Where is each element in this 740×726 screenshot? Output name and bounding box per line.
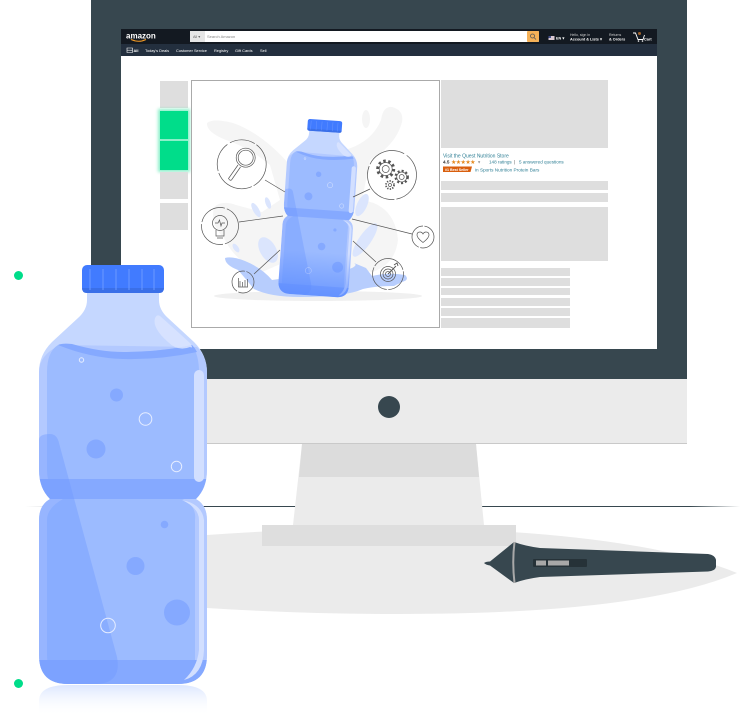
store link: Visit the Quest Nutrition Store [443,154,509,160]
nav links: Gift Cards [235,48,253,53]
blue droplets [231,192,381,266]
icon: heart [412,226,434,248]
blue puddle [225,257,407,297]
header links: Cart [644,38,652,42]
highlighted thumbnails [158,109,190,172]
header links [548,32,652,42]
product info column [441,80,608,328]
header links: Account & Lists ▾ [570,38,603,42]
header links: Hello, sign in [570,33,590,37]
best seller badge [443,166,540,172]
product thumbnails [158,81,190,230]
product image panel [192,80,440,328]
grey splash background [207,107,402,272]
text placeholders [441,181,608,328]
nav links: All [134,48,138,53]
monitor stand [262,444,516,546]
stylus pen [484,542,716,583]
search bar [190,31,539,42]
small bottle [278,118,360,298]
nav links: Today's Deals [145,48,169,53]
nav links: Registry [214,48,228,53]
amazon logo: amazon [126,32,156,40]
nav links [127,48,267,53]
horizon line [25,506,740,507]
search bar: Search Amazon [207,34,235,39]
decorative dots [14,271,23,688]
floor shadow [214,291,422,301]
header links: EN ▾ [556,36,565,40]
nav links: Customer Service [176,48,207,53]
ratings row: 148 ratings [489,160,512,164]
icon: light bulb [202,208,238,244]
amazon header bar [121,29,657,56]
best seller badge: in Sports Nutrition Protein Bars [475,168,540,172]
ratings row: | [514,160,515,164]
icon: gears [368,150,416,200]
connector lines [239,180,412,274]
nav links: Sell [260,48,267,53]
ratings row [443,159,564,166]
bottle reflection [39,685,207,716]
screen [121,29,657,349]
monitor [91,0,687,546]
large water bottle [39,265,207,684]
best seller badge: #1 Best Seller [445,168,469,172]
monitor chin [91,379,687,444]
ratings row: ★★★★★ [451,159,475,166]
header links: Returns [609,33,622,37]
header links: & Orders [609,38,625,42]
title placeholder [441,80,608,148]
icon: bar chart [232,271,254,293]
desk shadow [207,528,737,614]
monitor bezel [91,0,687,379]
ratings row: 5 answered questions [519,160,564,164]
icon: magnifier [217,140,266,189]
icon: target [372,258,404,290]
ratings row: 4.5 [443,160,450,164]
search bar: All ▾ [193,35,200,39]
ratings row: ▾ [478,160,481,164]
